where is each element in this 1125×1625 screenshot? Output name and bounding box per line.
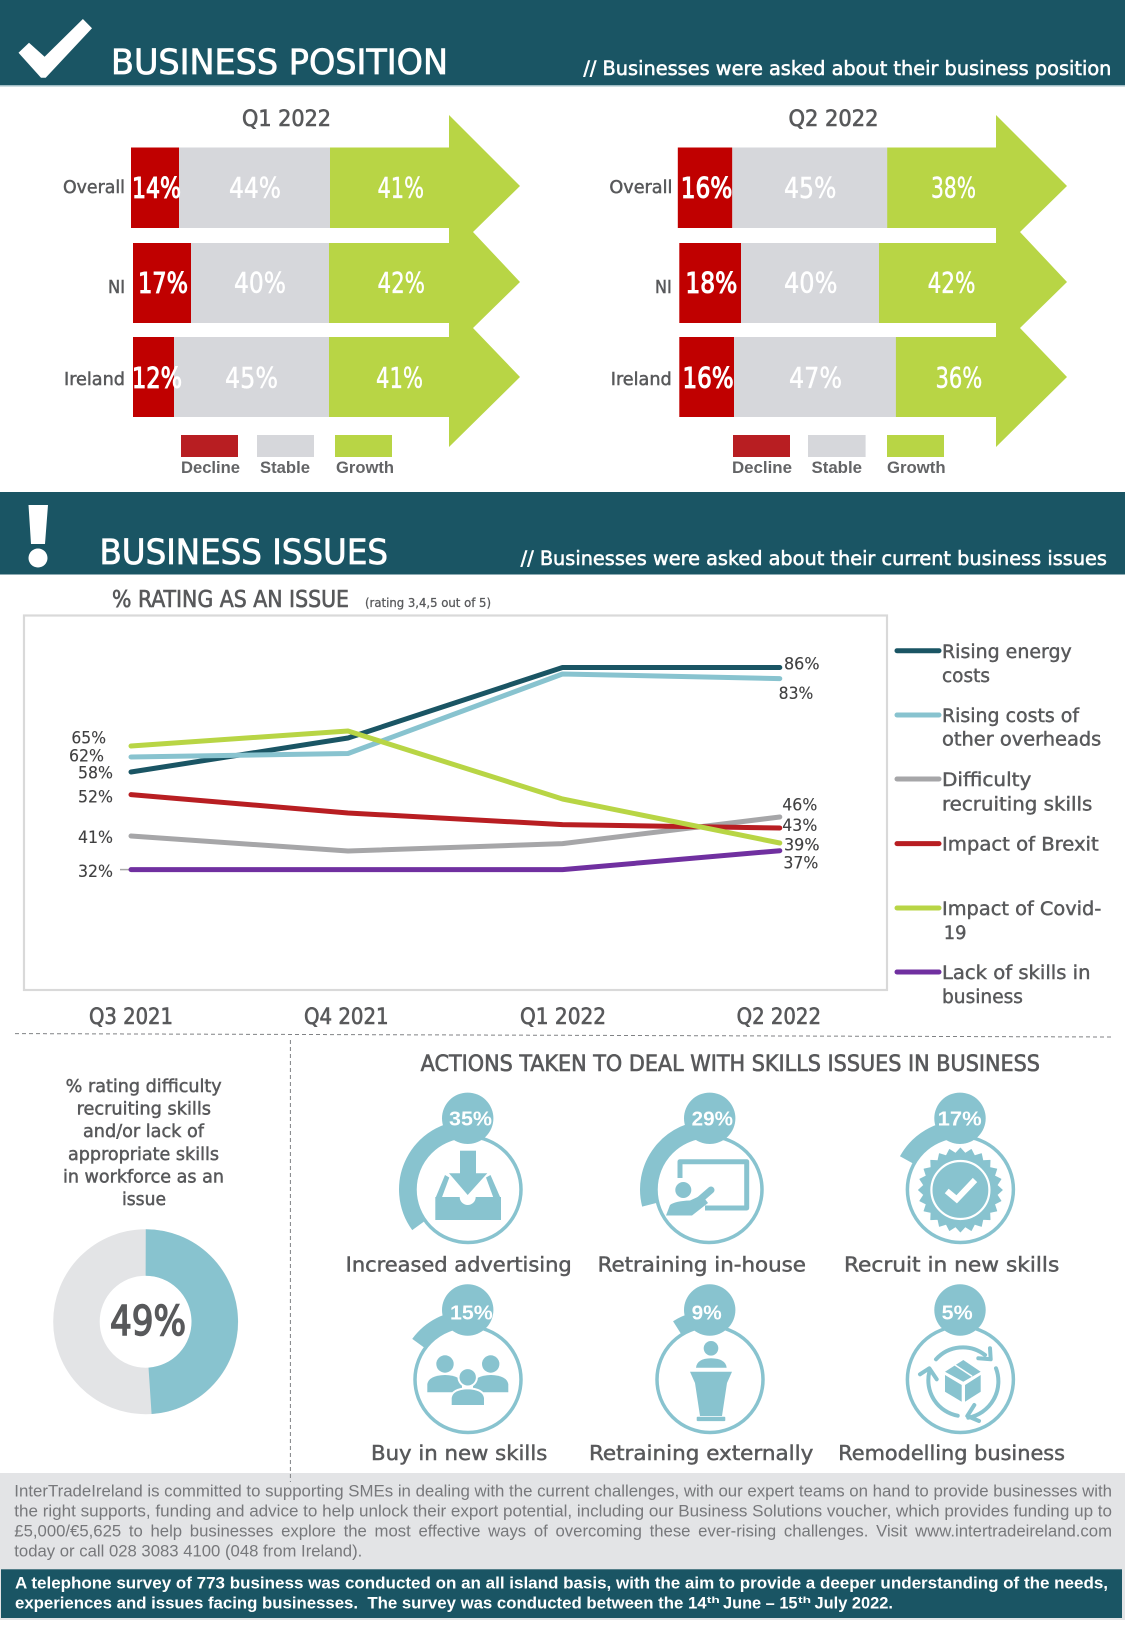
- row: NI Q2: NI: [655, 278, 672, 298]
- chart legend: Lack of skills in: [942, 963, 1090, 984]
- legend Q2: [732, 435, 946, 477]
- data labels: Q3 2021: 32%: [78, 862, 113, 882]
- action: remodelling business 5%: [838, 1284, 1065, 1465]
- row: overall Q1: [63, 148, 424, 228]
- icon: speaker at podium: [690, 1341, 732, 1421]
- icon: exclamation mark: [28, 505, 48, 568]
- line chart: issues over time: [24, 616, 887, 1030]
- data labels: Q3 2021: 58%: [78, 764, 113, 784]
- footer: survey note: A telephone survey of 773 business was conducted on an all island basis, with the aim to provide a deeper understanding of the needs,: [15, 1574, 1108, 1592]
- data labels: Q3 2021: 52%: [78, 788, 113, 808]
- heading: rating as an issue: [112, 587, 491, 613]
- chart legend: other overheads: [942, 730, 1101, 751]
- x axis labels: Q1 2022: [520, 1005, 606, 1030]
- footer: survey note: [1, 1569, 1122, 1618]
- x axis labels: [89, 1005, 821, 1030]
- row: NI Q1: 40%: [234, 267, 286, 300]
- subtitle: business issues: // Businesses were asked about their current business issues: [521, 547, 1107, 570]
- chart legend: Rising energy: [942, 642, 1072, 663]
- chart legend: costs: [942, 666, 990, 687]
- data labels: Q2 2022: 83%: [779, 684, 813, 704]
- action: retraining in-house 29%: [598, 1093, 806, 1277]
- donut chart: 49%: [76, 1252, 215, 1391]
- chart legend: Impact of Brexit: [942, 835, 1099, 856]
- data labels: Q2 2022: 37%: [783, 854, 818, 874]
- action: increased advertising 35%: Increased advertising: [346, 1253, 572, 1277]
- row: Ireland Q2: 36%: [936, 362, 982, 395]
- action: remodelling business 5%: Remodelling business: [838, 1441, 1065, 1465]
- data labels: Q2 2022: 43%: [782, 816, 817, 836]
- text: donut caption: issue: [122, 1189, 166, 1210]
- heading: rating as an issue: (rating 3,4,5 out of 5): [365, 595, 491, 610]
- action: retraining externally 9%: [589, 1284, 813, 1465]
- row: overall Q2: 16%: [681, 172, 732, 205]
- row: NI Q1: NI: [108, 278, 125, 298]
- legend Q2: Growth: [887, 458, 946, 477]
- data labels: Q2 2022: 86%: [784, 655, 820, 675]
- icon: check mark: [18, 19, 92, 78]
- row: overall Q1: 14%: [132, 172, 181, 205]
- arrow: growth segments Q1: [329, 115, 520, 447]
- legend Q1: Decline: [181, 458, 240, 477]
- data labels: Q2 2022: 39%: [784, 836, 820, 856]
- panel: actions taken: [346, 1052, 1065, 1465]
- row: Ireland Q1: 41%: [376, 362, 423, 395]
- row: NI Q2: [655, 243, 976, 323]
- x axis labels: Q3 2021: [89, 1005, 173, 1030]
- row: overall Q2: [609, 148, 976, 228]
- action: remodelling business 5%: 5%: [942, 1302, 973, 1324]
- text: donut caption: and/or lack of: [83, 1121, 205, 1142]
- line: rising costs of other overheads: [131, 674, 780, 757]
- text: donut caption: recruiting skills: [77, 1098, 211, 1119]
- footer: grey information panel: [0, 1473, 1125, 1620]
- row: overall Q2: Overall: [609, 178, 672, 198]
- icon: group of people: [427, 1355, 508, 1406]
- chart legend: recruiting skills: [942, 795, 1092, 816]
- icon: box with cycle arrows: [920, 1347, 998, 1421]
- panel: Q2 2022 position: [609, 107, 1067, 477]
- legend Q1: Growth: [336, 458, 394, 477]
- x axis labels: Q2 2022: [737, 1005, 821, 1030]
- panel: skills issue donut: [63, 1076, 224, 1391]
- chart legend: [897, 642, 1101, 1008]
- row: Ireland Q1: 12%: [132, 362, 182, 395]
- action: recruit in new skills 17%: 17%: [938, 1109, 982, 1131]
- section header: business position: [0, 0, 1125, 86]
- heading: business issues: BUSINESS ISSUES: [100, 533, 388, 573]
- line: impact of Covid-19: [131, 731, 780, 843]
- icon: teacher at board: [666, 1162, 747, 1216]
- row: NI Q1: 17%: [138, 267, 188, 300]
- donut value: 49%: [110, 1297, 186, 1345]
- heading: actions taken: ACTIONS TAKEN TO DEAL WITH SKILLS ISSUES IN BUSINESS: [421, 1052, 1040, 1077]
- legend Q2: Decline: [732, 458, 792, 477]
- data labels: Q2 2022: [779, 655, 820, 874]
- row: Ireland Q2: Ireland: [611, 370, 672, 390]
- row: Ireland Q1: 45%: [225, 362, 278, 395]
- line: difficulty recruiting skills: [131, 817, 780, 851]
- text: donut caption: [63, 1076, 224, 1210]
- row: Ireland Q2: 16%: [682, 362, 734, 395]
- legend Q1: Stable: [260, 458, 310, 477]
- row: Ireland Q2: [611, 337, 982, 417]
- footer: survey note: th: [707, 1595, 720, 1606]
- data labels: Q3 2021: 62%: [69, 746, 104, 766]
- row: overall Q1: 41%: [378, 172, 424, 205]
- action: retraining externally 9%: 9%: [692, 1302, 722, 1324]
- heading: Q2 2022: Q2 2022: [788, 107, 878, 132]
- data labels: Q3 2021: 65%: [71, 729, 106, 749]
- panel: Q1 2022 position: [63, 107, 520, 477]
- line: rising energy costs: [131, 668, 780, 772]
- subtitle: business position: // Businesses were asked about their business position: [583, 57, 1111, 80]
- action: increased advertising 35%: 35%: [449, 1109, 492, 1131]
- chart legend: Rising costs of: [942, 706, 1080, 727]
- section header: business issues: [0, 492, 1125, 574]
- arrow: growth segments Q2: [875, 115, 1067, 447]
- action: retraining externally 9%: Retraining externally: [589, 1441, 813, 1465]
- data labels: Q3 2021: 41%: [78, 828, 113, 848]
- text: donut caption: % rating difficulty: [66, 1076, 222, 1097]
- text: donut caption: in workforce as an: [63, 1167, 224, 1188]
- footer: survey note: experiences and issues facing businesses. The survey was conducted between the 14: [15, 1594, 708, 1612]
- chart legend: business: [942, 987, 1023, 1008]
- text: donut caption: appropriate skills: [68, 1144, 219, 1165]
- icon: seal with check: [918, 1148, 1002, 1232]
- row: Ireland Q2: 47%: [789, 362, 842, 395]
- footer: survey note: th: [798, 1595, 811, 1606]
- row: NI Q2: 42%: [928, 267, 976, 300]
- row: overall Q1: 44%: [229, 172, 281, 205]
- action: retraining in-house 29%: 29%: [692, 1109, 733, 1131]
- chart legend: Impact of Covid-: [942, 899, 1101, 920]
- footer: grey information panel: the right supports, funding and advice to help unlock their export potential, including our Business Solutions voucher, which provides funding up to: [14, 1503, 1112, 1521]
- row: NI Q2: 18%: [685, 267, 737, 300]
- action: retraining in-house 29%: Retraining in-house: [598, 1253, 806, 1277]
- chart legend: 19: [944, 923, 966, 944]
- action: recruit in new skills 17%: [844, 1093, 1059, 1277]
- row: NI Q1: 42%: [378, 267, 425, 300]
- row: NI Q2: 40%: [784, 267, 838, 300]
- x axis labels: Q4 2021: [304, 1005, 389, 1030]
- line: lack of skills in business: [131, 851, 780, 870]
- heading: business position: BUSINESS POSITION: [111, 43, 448, 83]
- row: Ireland Q1: [64, 337, 423, 417]
- footer: survey note: June – 15: [723, 1594, 798, 1612]
- row: overall Q1: Overall: [63, 178, 125, 198]
- row: NI Q1: [108, 243, 425, 323]
- action: recruit in new skills 17%: Recruit in new skills: [844, 1253, 1059, 1277]
- row: Ireland Q1: Ireland: [64, 370, 125, 390]
- footer: survey note: July 2022.: [814, 1594, 893, 1612]
- data labels: Q3 2021: [69, 729, 113, 882]
- data labels: Q2 2022: 46%: [782, 796, 817, 816]
- row: overall Q2: 45%: [784, 172, 836, 205]
- legend Q2: Stable: [812, 458, 862, 477]
- action: increased advertising 35%: [346, 1093, 572, 1277]
- row: overall Q2: 38%: [931, 172, 976, 205]
- chart legend: Difficulty: [942, 770, 1032, 791]
- footer: grey information panel: £5,000/€5,625 to help businesses explore the most effective ways of overcoming these ever-rising challenges. Visit www.intertradeireland.com: [14, 1523, 1112, 1541]
- footer: grey information panel: InterTradeIreland is committed to supporting SMEs in dealing with the current challenges, with our expert teams on hand to provide businesses with: [14, 1483, 1112, 1501]
- heading: rating as an issue: % RATING AS AN ISSUE: [112, 587, 349, 613]
- heading: Q1 2022: Q1 2022: [242, 107, 331, 132]
- footer: grey information panel: today or call 028 3083 4100 (048 from Ireland).: [14, 1543, 362, 1561]
- action: buy in new skills 15%: Buy in new skills: [371, 1441, 547, 1465]
- action: buy in new skills 15%: 15%: [450, 1302, 493, 1324]
- legend Q1: [181, 435, 394, 477]
- action: buy in new skills 15%: [371, 1284, 547, 1465]
- line: impact of Brexit: [131, 795, 780, 828]
- icon: inbox: [435, 1151, 501, 1220]
